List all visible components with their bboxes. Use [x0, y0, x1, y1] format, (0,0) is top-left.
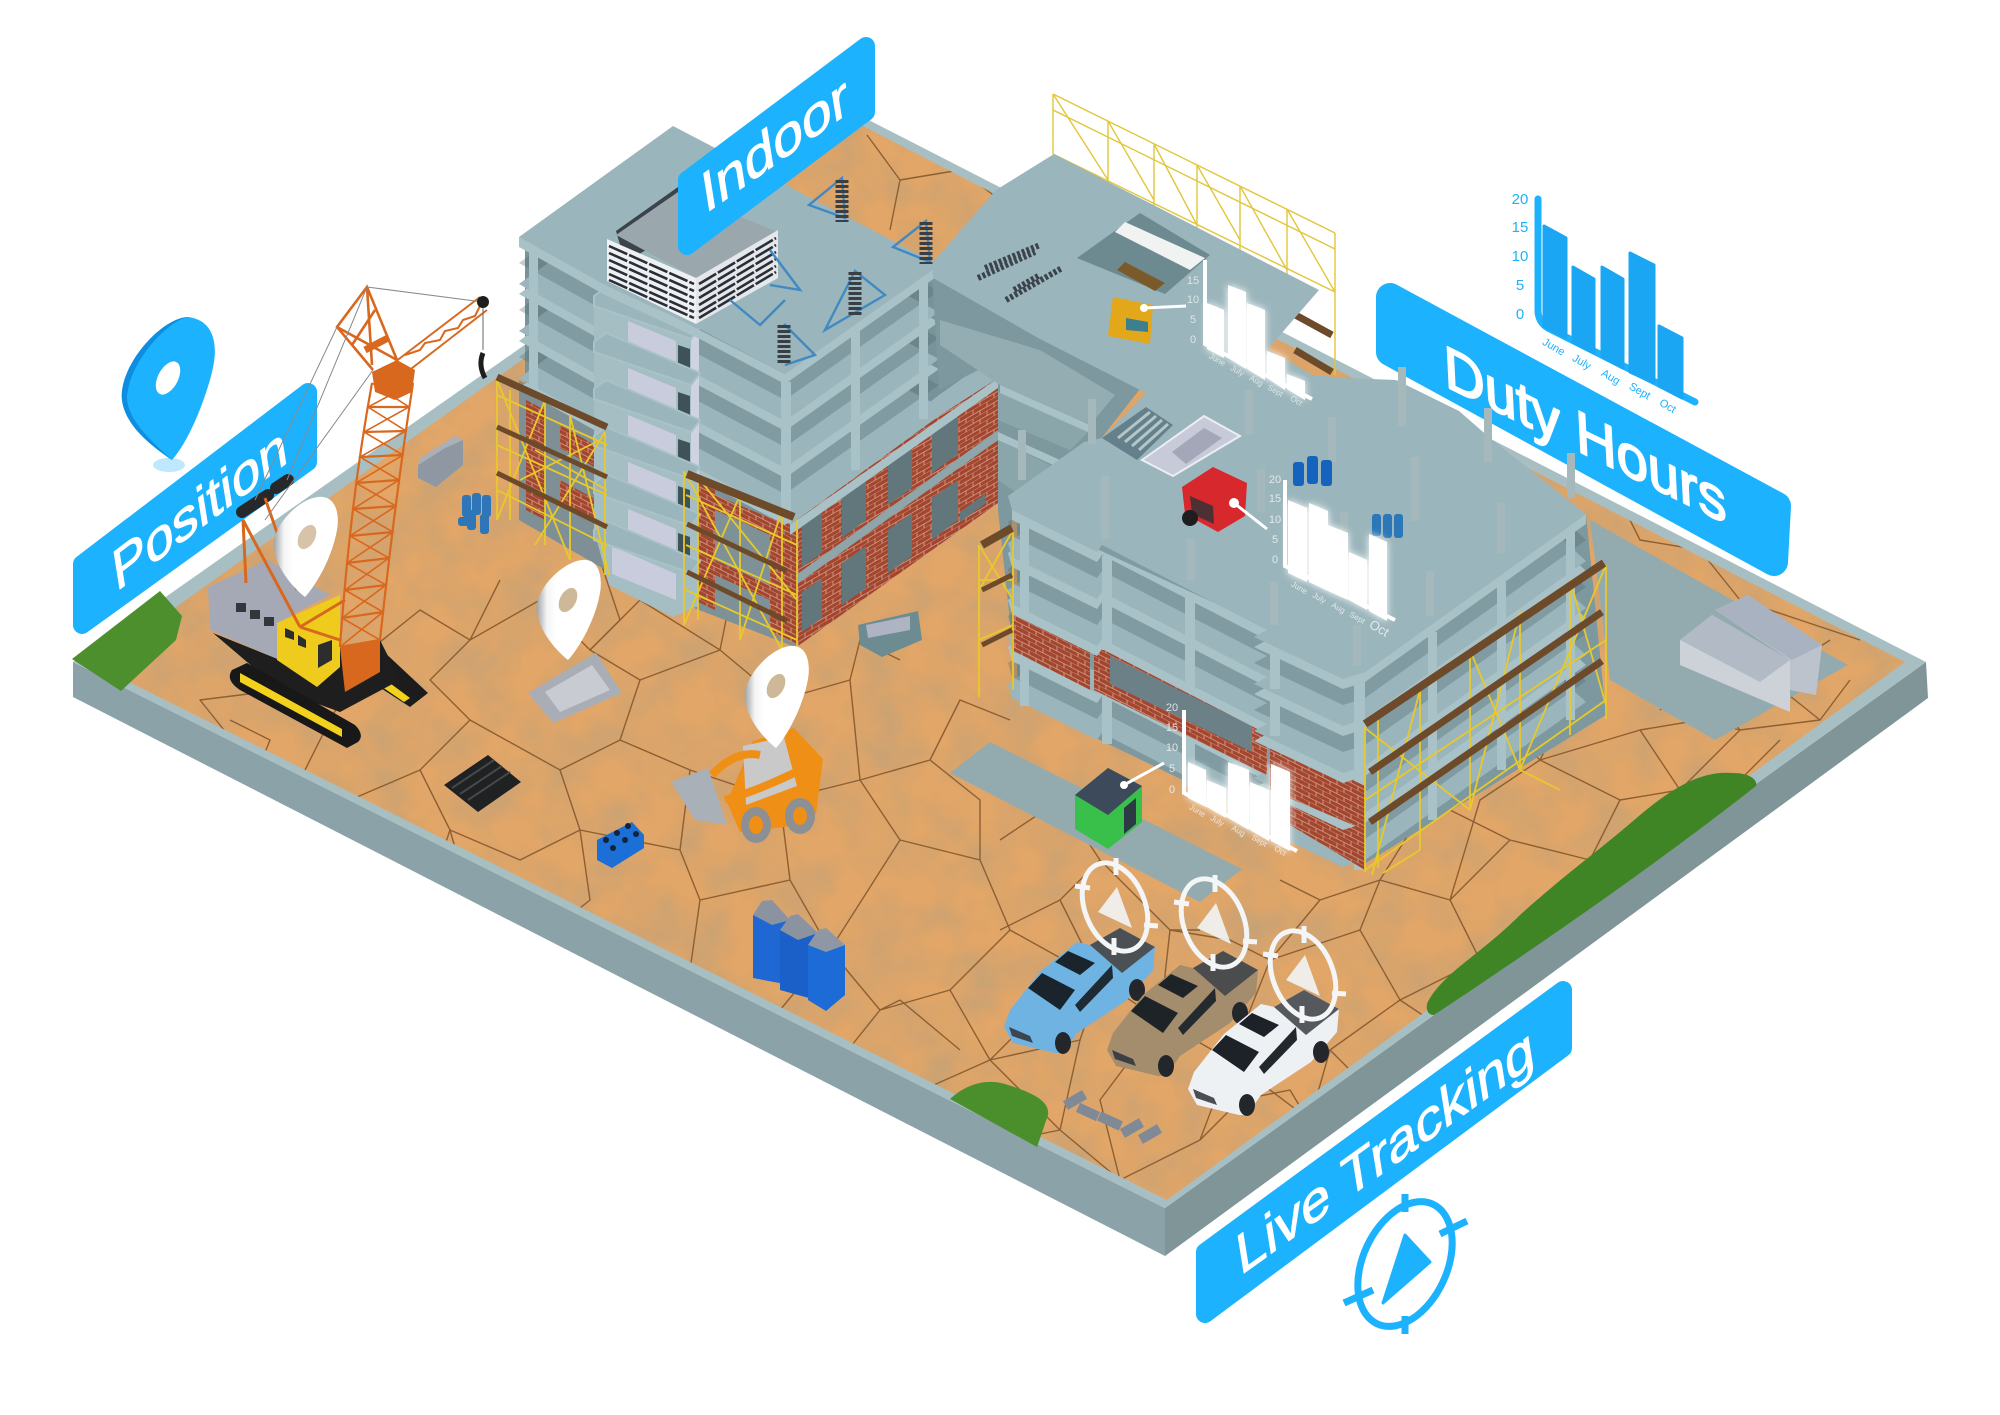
core ledges: [594, 287, 700, 573]
chart labels: Aug: [1248, 373, 1265, 388]
chart labels: 15: [1269, 493, 1281, 505]
chart labels: Oct: [1367, 617, 1392, 640]
chart labels: 15: [1166, 722, 1178, 734]
chart axis labels: 5: [1516, 277, 1524, 294]
chart bars: [1207, 285, 1305, 400]
chart bars: [1544, 226, 1682, 398]
chart axis: [1285, 480, 1395, 620]
crane engine house: [208, 560, 330, 660]
loader arm: [712, 754, 800, 800]
label: Position: Position: [108, 414, 291, 604]
right block brick bands: [1012, 603, 1365, 830]
roof stair opening: [1102, 407, 1173, 460]
chart labels: July: [1311, 590, 1328, 605]
equipment: skid steer loader: [671, 728, 823, 843]
car: white pickup: [1188, 990, 1339, 1116]
chart labels: 0: [1190, 334, 1196, 346]
building roof slab: [933, 154, 1586, 679]
chart axis labels: 20: [1512, 191, 1528, 208]
chart: white on red generator: [1269, 474, 1395, 640]
chart bars: [1288, 500, 1387, 621]
car: brown pickup: [1107, 951, 1258, 1077]
formwork left face: [607, 239, 696, 324]
chart axis: [1205, 260, 1312, 399]
chart labels: July: [1229, 363, 1246, 378]
chart labels: 15: [1187, 275, 1199, 287]
chart labels: 20: [1166, 702, 1178, 714]
equipment: crane counterweights: [242, 480, 345, 640]
formwork floor: [616, 192, 778, 278]
building: connector floors: [932, 272, 1143, 640]
right block body: [1017, 505, 1606, 866]
chart labels: Sept: [1348, 610, 1367, 626]
chart labels: Aug: [1230, 823, 1247, 838]
building: right block floor stack: [1008, 492, 1606, 870]
chart labels: Oct: [1289, 394, 1305, 408]
tracker ring 3: [1258, 921, 1348, 1029]
tower core: [594, 287, 700, 617]
generator: red: [1182, 467, 1267, 532]
items: gray brick pile: [1063, 1090, 1162, 1144]
chart labels: July: [1209, 813, 1226, 828]
crane cab: [277, 595, 340, 687]
crane turntable: [372, 360, 415, 400]
crane base block: [340, 640, 380, 692]
icon: blue position pin: [122, 317, 215, 472]
chart axis labels: 10: [1512, 248, 1528, 265]
tracker ring 2: [1169, 869, 1259, 977]
grass patch middle: [950, 1082, 1048, 1147]
chart labels: 0: [1169, 784, 1175, 796]
right block lower brick corner: [1290, 775, 1365, 870]
tower brick wall right: [794, 367, 998, 646]
rear pavement: [1590, 520, 1848, 740]
items: black pipes: [444, 755, 521, 812]
chart axis labels: 15: [1512, 219, 1528, 236]
formwork right face: [696, 230, 778, 324]
chart: white on green generator: [1166, 702, 1297, 858]
grass patch left: [72, 591, 182, 691]
rebar pile on roof: [978, 245, 1062, 300]
icon: white pin on crane: [274, 497, 338, 597]
equipment: crane lattice mast: [255, 287, 489, 692]
items: blue barrels: [458, 493, 491, 534]
chart labels: [1269, 474, 1392, 640]
crane deck: [213, 633, 400, 712]
crane front track: [230, 663, 361, 748]
roof shaft: [1142, 416, 1240, 476]
tower front lower wall: [673, 470, 798, 648]
chart labels: 5: [1272, 534, 1278, 546]
scaffold: rear yellow frame: [1053, 94, 1335, 375]
label: Position: [82, 392, 308, 625]
chart labels: June: [1187, 803, 1207, 819]
chart axis labels: Aug: [1599, 367, 1622, 387]
chart labels: 10: [1187, 294, 1199, 306]
platform base: [73, 113, 1928, 1256]
items: roof barrels second: [1372, 514, 1403, 538]
crane A-frame: [337, 287, 397, 370]
chart axis: [1184, 710, 1297, 851]
chart labels: Sept: [1250, 833, 1269, 849]
chart axis labels: June: [1540, 336, 1567, 359]
chart labels: [1187, 275, 1305, 408]
loader wheels: [741, 798, 815, 843]
chart labels: June: [1207, 352, 1227, 368]
chart labels: 10: [1166, 742, 1178, 754]
icon: white pin on loader: [745, 646, 809, 748]
loader bucket front: [671, 768, 727, 825]
generator: yellow: [1108, 297, 1186, 344]
formwork on roof: [607, 187, 778, 324]
equipment: loader bucket: [528, 653, 622, 723]
scaffold: middle column: [979, 528, 1013, 697]
items: gray blocks: [418, 436, 463, 487]
loader cage: [743, 737, 797, 805]
label: Indoor: Indoor: [697, 64, 852, 226]
formwork braces on roof: [730, 178, 930, 365]
crane boom: [395, 297, 487, 372]
items: blue portable toilets: [753, 900, 845, 1011]
chart labels: 20: [1269, 474, 1281, 486]
car: blue pickup: [1004, 928, 1155, 1054]
chart axis: [1538, 199, 1695, 402]
building: tower: [519, 152, 998, 648]
icon: white tracker rings: [1070, 853, 1348, 1029]
scaffold: tower left: [497, 377, 609, 575]
scaffold: right block: [1365, 563, 1606, 875]
ground surface: [95, 122, 1905, 1200]
chart: blue duty hours: [1512, 191, 1695, 416]
chart labels: Aug: [1330, 600, 1347, 615]
label: Live Tracking: Live Tracking: [1232, 1015, 1538, 1288]
items: small blue barrels: [597, 822, 644, 868]
items: roof barrels: [1293, 456, 1332, 486]
tower roof: [519, 126, 939, 374]
label: Duty Hours: [1390, 297, 1777, 562]
tracker ring 1: [1070, 853, 1160, 961]
icon: blue live tracking target: [1339, 1186, 1471, 1342]
chart labels: 0: [1272, 554, 1278, 566]
tower roof rim: [519, 237, 939, 384]
generator: green: [1075, 763, 1164, 849]
scaffold: tower front: [684, 471, 797, 650]
roof stubs of columns: [1018, 367, 1575, 666]
chart labels: 5: [1169, 763, 1175, 775]
chart axis labels: July: [1570, 352, 1593, 373]
tower body: [525, 245, 998, 520]
roof opening top: [1077, 213, 1210, 294]
items: containers: [1680, 595, 1822, 712]
building roof rim: [1012, 510, 1586, 689]
grass strip right: [1427, 773, 1756, 1015]
label: Duty Hours: Duty Hours: [1442, 332, 1728, 538]
chart bars: [1188, 762, 1290, 851]
loader body: [727, 728, 823, 832]
chart labels: June: [1289, 580, 1309, 596]
icon: white pin on bucket: [537, 560, 601, 660]
ground cracks: [200, 135, 1860, 1180]
tower left scaffold wall: [519, 380, 609, 572]
chart axis labels: 0: [1516, 306, 1524, 323]
chart labels: [1166, 702, 1289, 858]
equipment: crawler crane base: [208, 560, 428, 748]
chart labels: 10: [1269, 514, 1281, 526]
chart: white on yellow generator: [1187, 260, 1312, 408]
tower floor stack: [519, 152, 998, 535]
chart labels: 5: [1190, 314, 1196, 326]
chart labels: Sept: [1266, 383, 1285, 399]
chart axis labels: [1512, 191, 1678, 416]
crane rear track: [373, 650, 428, 707]
formwork back wall: [616, 187, 678, 262]
items: dumpster: [858, 611, 922, 657]
formwork columns: [784, 180, 926, 365]
front pavement: [950, 742, 1242, 902]
chart labels: Oct: [1273, 844, 1289, 858]
chart axis labels: Sept: [1627, 381, 1652, 402]
chart axis labels: Oct: [1657, 397, 1678, 416]
